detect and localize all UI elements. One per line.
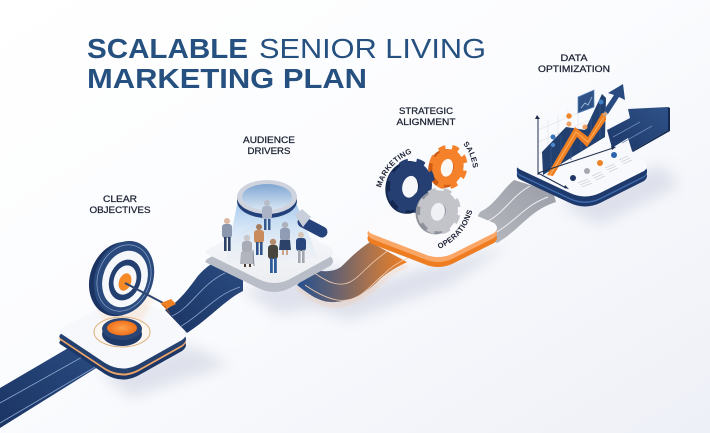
label: audience drivers: AUDIENCE <box>243 135 295 145</box>
label: clear objectives: OBJECTIVES <box>90 205 150 215</box>
person: woman grey hair with cane <box>240 235 254 267</box>
big arrow behind optimization platform <box>607 107 670 152</box>
person: man navy jacket <box>296 232 306 263</box>
gear: sales orange <box>428 144 468 190</box>
road: grey ribbon to optimization <box>470 180 556 243</box>
legend dots on data platform <box>570 152 632 187</box>
label: data optimization: OPTIMIZATION <box>538 64 610 74</box>
label: data optimization: DATA <box>560 53 588 63</box>
person: man dark top <box>268 239 278 273</box>
label: clear objectives: CLEAR <box>103 194 138 204</box>
panel: audience drivers platform <box>205 218 333 292</box>
label: strategic alignment: STRATEGIC <box>399 106 454 116</box>
chart: growth chart with arrow <box>535 84 625 189</box>
icon: target with arrow <box>79 232 176 347</box>
panel: data optimization platform <box>517 134 647 206</box>
title: SENIOR LIVING <box>259 33 486 64</box>
gear label: marketing: MARKETING <box>376 149 412 188</box>
gear: marketing navy <box>386 158 436 214</box>
gear: operations grey <box>417 188 461 234</box>
gear label: operations: OPERATIONS <box>438 210 472 248</box>
road: ribbon to audience <box>165 263 243 333</box>
icon: magnifying glass <box>225 180 322 265</box>
label: audience drivers: DRIVERS <box>248 146 290 156</box>
gear label: sales: SALES <box>464 142 478 168</box>
panel: clear objectives platform <box>59 296 186 380</box>
soft ground shadows <box>100 165 680 398</box>
person: lens figure <box>262 200 272 230</box>
label: strategic alignment: ALIGNMENT <box>396 117 456 127</box>
road: start ribbon <box>0 347 101 428</box>
road: gradient ribbon to alignment <box>297 242 408 305</box>
person: woman orange top <box>254 224 264 255</box>
person: woman grey dress <box>279 222 291 255</box>
title: SCALABLE <box>87 33 248 64</box>
title <box>87 33 486 94</box>
panel: strategic alignment platform <box>368 197 497 267</box>
people group <box>222 200 306 273</box>
title: MARKETING PLAN <box>87 63 367 94</box>
person: man grey sweater <box>222 218 232 251</box>
icon: gears <box>386 144 468 234</box>
